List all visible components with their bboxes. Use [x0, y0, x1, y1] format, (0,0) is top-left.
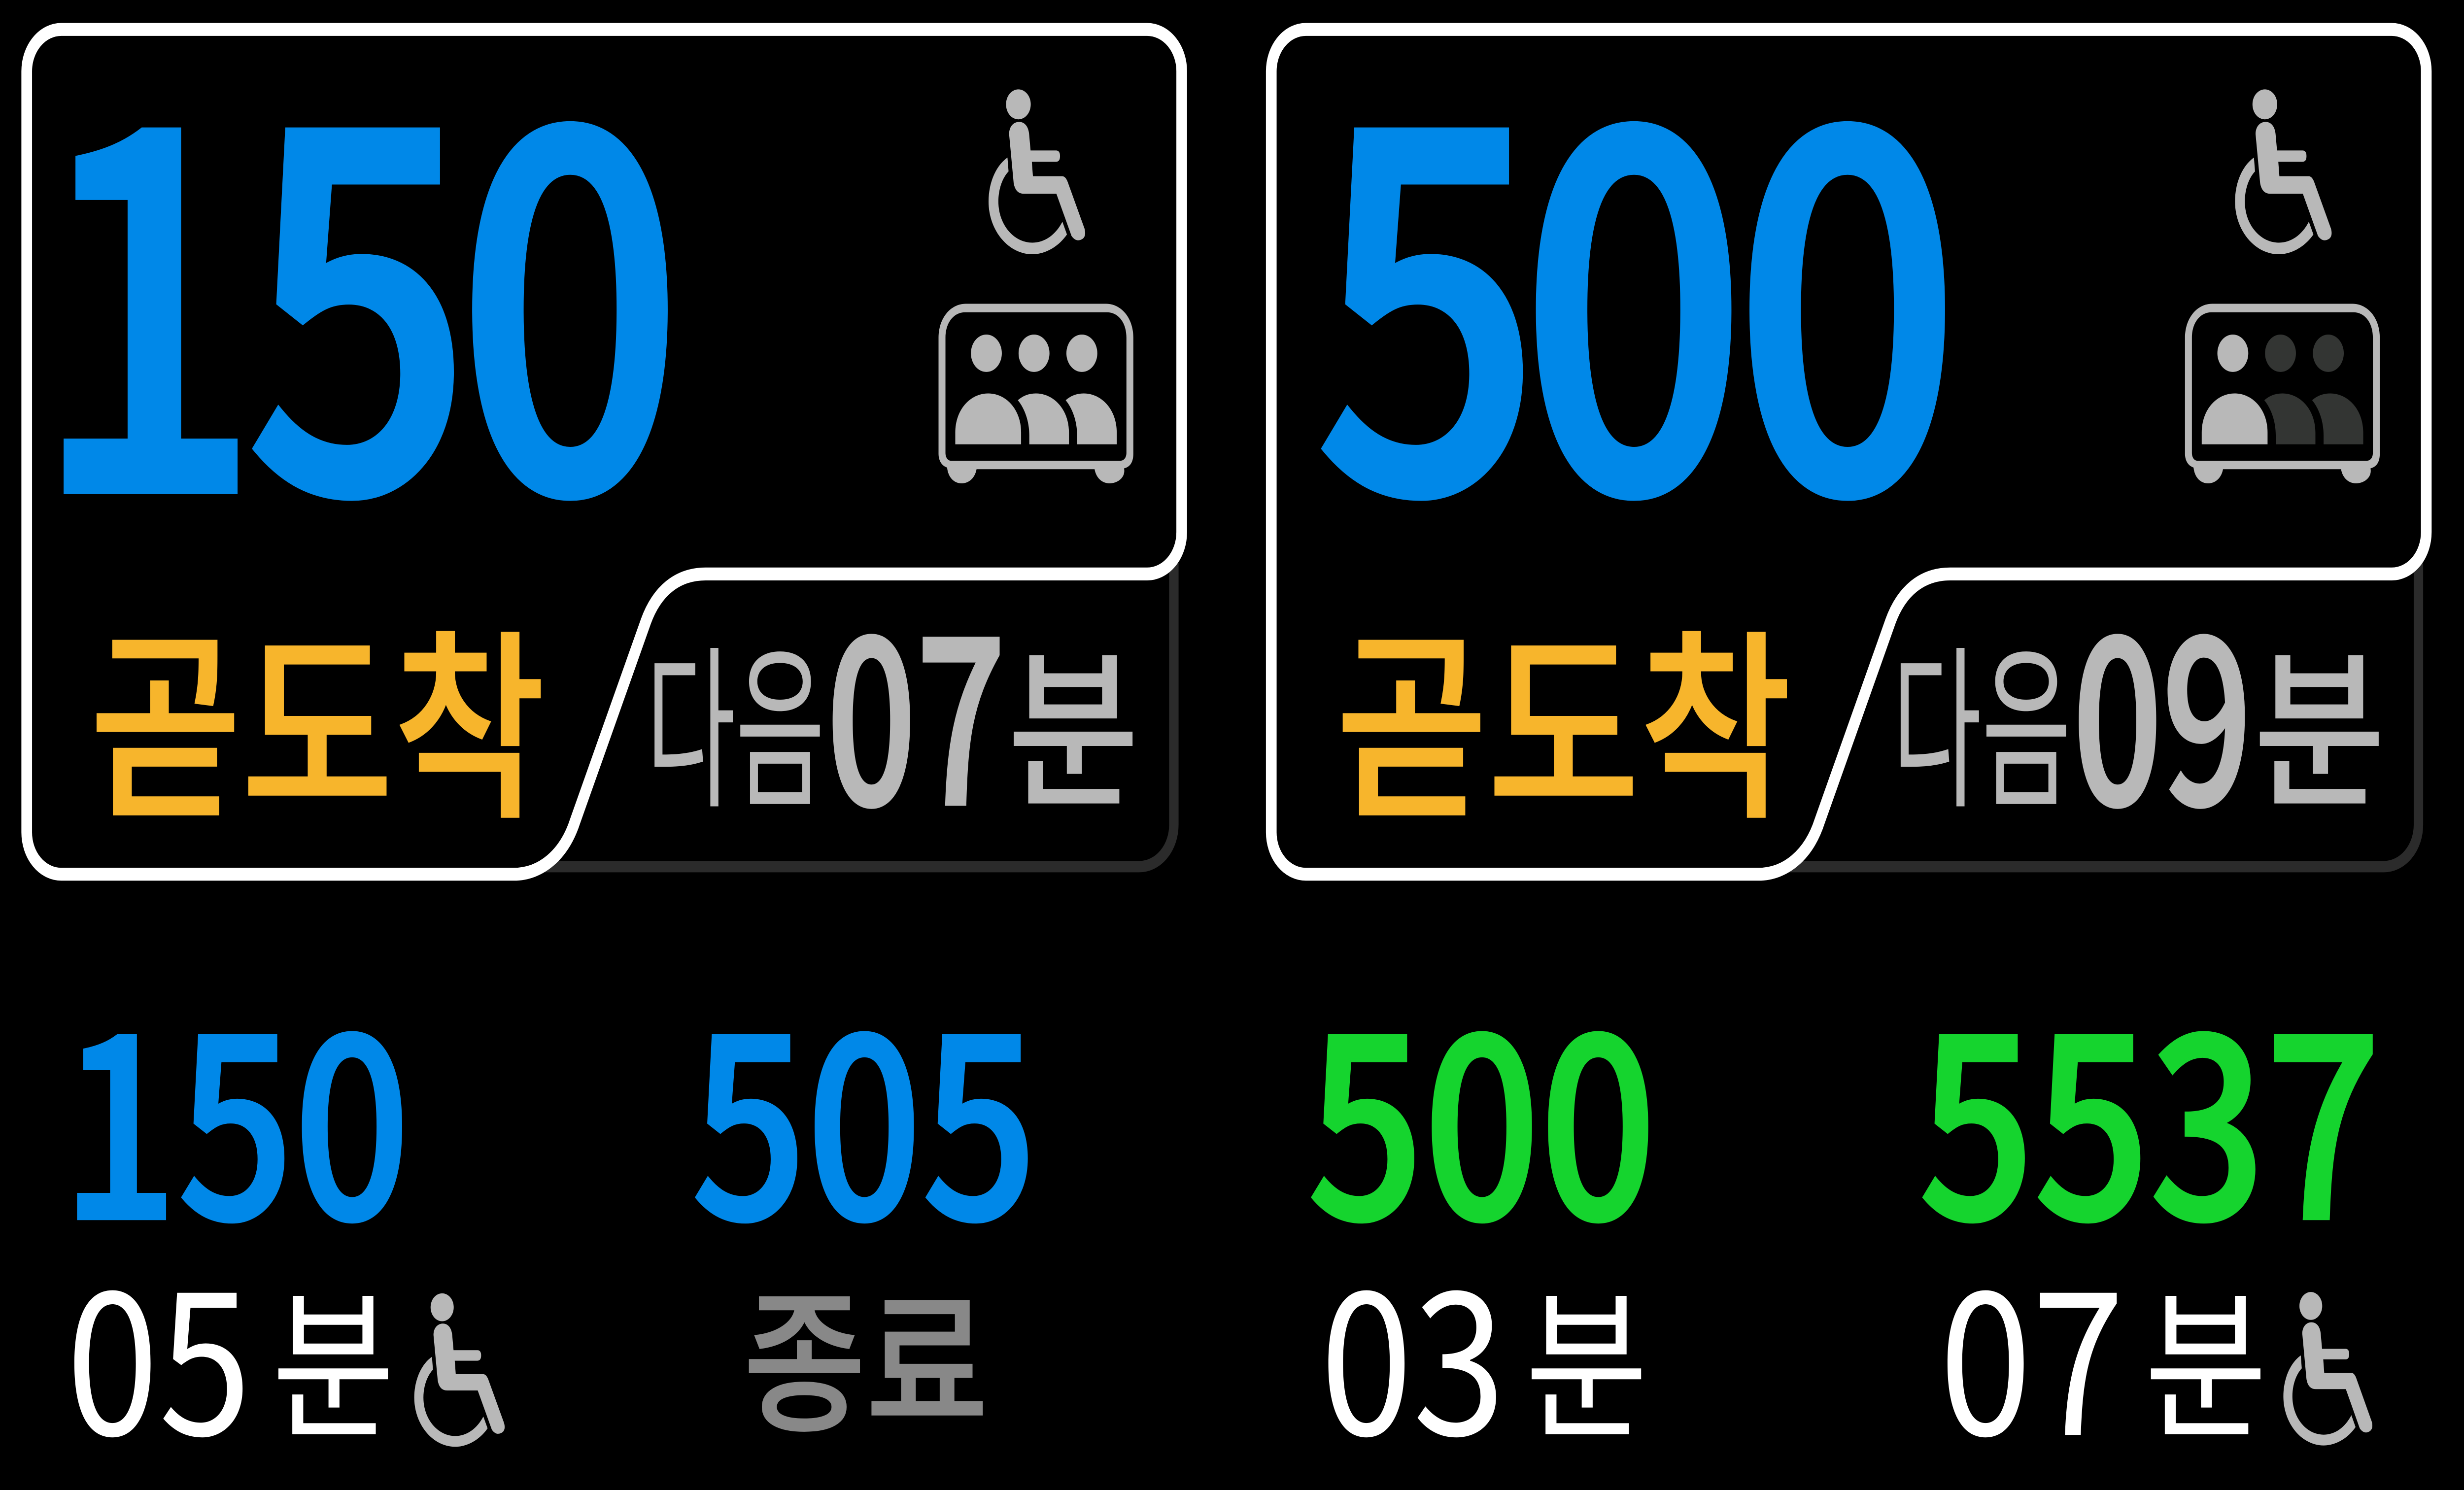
list item: route 5537 [1918, 932, 2381, 1490]
icon: wheelchair [414, 1293, 505, 1447]
next bus minutes: 07 [826, 544, 1006, 869]
icon: wheelchair [2283, 1292, 2372, 1446]
icon: wheelchair [989, 89, 1085, 254]
list item: route 500 [1307, 932, 1656, 1490]
minutes value: 05 [66, 1210, 251, 1490]
icon: wheelchair [2235, 89, 2331, 254]
panel: route 500 arrival sign [1271, 0, 2426, 874]
icon: bus occupancy low [2185, 304, 2380, 483]
list item: route 505 [691, 932, 1037, 1463]
next bus label: 다음 [1892, 589, 2071, 843]
minutes unit: 분 [2144, 1237, 2267, 1472]
route number: 150 [61, 932, 410, 1289]
arrival status: 곧도착 [90, 567, 546, 859]
minutes unit: 분 [1525, 1237, 1648, 1472]
minutes unit: 분 [2254, 594, 2386, 842]
list item: route 150 [61, 932, 505, 1490]
route number: 500 [1307, 932, 1656, 1289]
route number: 5537 [1918, 932, 2381, 1289]
route number: 505 [691, 932, 1037, 1289]
minutes unit: 분 [1007, 594, 1139, 842]
arrival status: 곧도착 [1335, 567, 1791, 859]
minutes unit: 분 [272, 1237, 395, 1472]
minutes value: 03 [1320, 1210, 1506, 1490]
minutes value: 07 [1939, 1210, 2124, 1490]
next-bus tab outline [1779, 563, 2419, 867]
icon: bus occupancy full [939, 304, 1133, 483]
panel outline [27, 30, 1182, 874]
panel: route 150 arrival sign [27, 0, 1182, 874]
end of service label: 종료 [743, 1240, 989, 1463]
next bus label: 다음 [646, 589, 825, 843]
next bus minutes: 09 [2073, 544, 2252, 869]
next-bus tab outline [534, 563, 1174, 867]
panel outline [1271, 30, 2426, 874]
